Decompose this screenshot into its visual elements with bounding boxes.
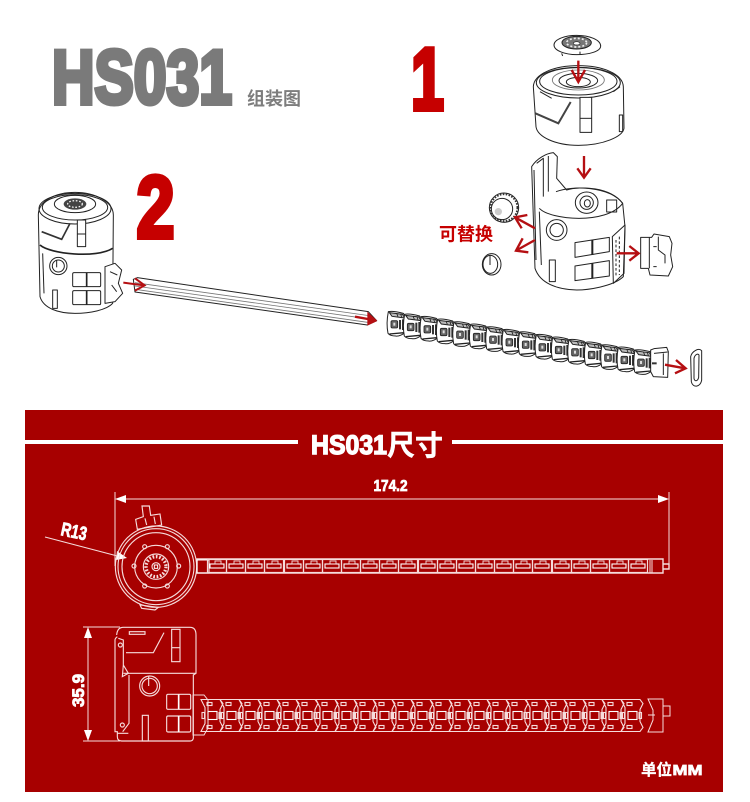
icon: knob on top (136, 506, 162, 529)
drawing: side view chain (193, 695, 670, 735)
icon: replaceable knob (489, 193, 519, 222)
diagram: step 1 exploded view (439, 35, 673, 290)
arrow: out of rod (355, 317, 373, 320)
icon: rod (133, 278, 377, 325)
arrow: into rod (123, 278, 145, 291)
dimension: height (69, 627, 120, 741)
heading: HS031 dimensions: 尺寸 (387, 430, 443, 461)
label: unit mm (641, 760, 702, 779)
arrow: down to lower body (577, 156, 591, 178)
dimension: overall length: 174.2 (374, 478, 408, 495)
icon: assembled cylinder (38, 192, 123, 313)
panel background (25, 410, 723, 792)
icon: top cap disc (554, 35, 601, 56)
icon: lower body (532, 153, 625, 290)
dimension: height: 35.9 (69, 674, 88, 707)
label: unit mm: 单位 (641, 760, 672, 779)
arrow: to knob (515, 215, 535, 228)
header rule left (25, 440, 298, 444)
arrow: to connector (617, 246, 639, 261)
panel: dimensions (25, 410, 723, 792)
drawing: top view body (115, 506, 197, 610)
heading: HS031 dimensions (311, 430, 443, 461)
icon: connector (641, 234, 673, 276)
diagram: step 2 assembled body and rod (38, 192, 377, 326)
icon: lower bump (140, 605, 158, 610)
dimension: radius: R13 (59, 519, 89, 545)
arrow: to dial (516, 238, 535, 252)
title: HS031: HS031 (52, 36, 232, 120)
icon: link chain (387, 311, 668, 377)
label: replaceable: 可替换 (439, 225, 493, 245)
arrow: to end ring (665, 360, 686, 373)
icon: end ring (691, 349, 702, 386)
arrow: cap down (572, 61, 585, 82)
header rule right (452, 440, 723, 444)
step number 2: 2 (136, 158, 174, 256)
dimension: radius (45, 519, 127, 560)
icon: round body rings (115, 526, 197, 607)
heading: HS031 dimensions: HS031 (311, 430, 387, 460)
arrow: from rod (368, 313, 377, 325)
icon: upper cylinder shell (533, 66, 624, 145)
drawing: side view body (115, 627, 196, 741)
step number 1: 1 (411, 30, 444, 128)
arrowhead: rod end (367, 312, 377, 326)
dimension: overall length (115, 478, 669, 567)
drawing: top view chain (197, 559, 669, 573)
subtitle: assembly diagram: 组装图 (247, 89, 301, 109)
label: unit mm: MM (672, 762, 702, 779)
icon: replaceable dial (482, 254, 501, 275)
diagram: chain strip exploded (368, 311, 702, 386)
